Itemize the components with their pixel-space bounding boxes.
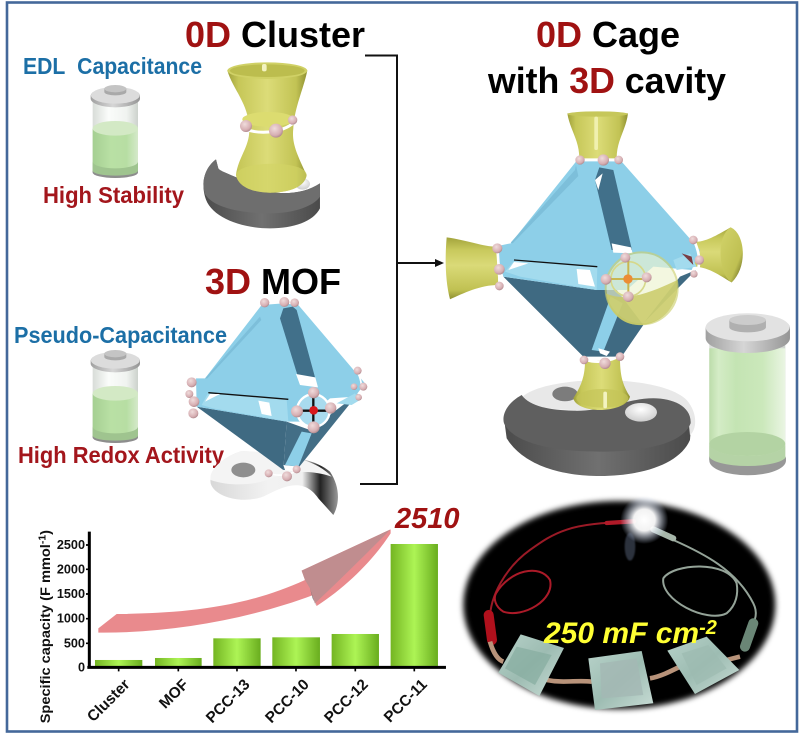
cage: light upper faces [495,161,700,290]
y axis title: ) [37,530,53,535]
x tick labels: PCC-11 [381,676,431,726]
bracket connector [360,56,397,484]
title: 0D Cage with 3D cavity: 0D Cage [536,14,680,55]
red wire [489,521,634,640]
y tick labels [57,538,85,674]
title: 3D MOF: 3D MOF [205,261,341,302]
y tick labels: 1500 [57,587,85,601]
label: Pseudo-Capacitance: Pseudo-Capacitance [14,322,227,348]
x tick labels: PCC-12 [321,676,372,727]
illustration: 0D cage with cavity [446,111,743,476]
arrow: to 0D cage [397,259,444,267]
left horn [446,237,498,299]
metal node balls [492,154,704,369]
cage: dark lower faces [503,277,643,357]
photo: LED powered by device chain [463,496,775,710]
cavity sphere [601,252,678,325]
x tick labels: PCC-10 [262,676,313,727]
label: High Redox Activity: High Redox Activity [18,442,224,468]
title: 0D Cage with 3D cavity [487,14,726,101]
axes [87,532,446,669]
y axis title: Specific capacity (F mmol [37,552,53,723]
y tick labels: 500 [64,636,85,650]
trend arrow [98,529,391,633]
x tick labels: Cluster [84,676,134,725]
right horn [693,227,743,282]
icon: battery small, cluster [91,85,140,178]
y tick labels: 2000 [57,562,85,576]
value label: 2510: 2510 [394,503,460,535]
bar chart: specific capacity [37,529,446,727]
label: High Stability: High Stability [43,182,184,208]
icon: battery small, MOF [91,350,140,443]
photo caption: 250 mF cm-2: -2 [699,617,717,639]
x tick labels: PCC-13 [203,676,253,727]
illustration: MOF octahedron on white base [185,297,367,515]
photo caption: 250 mF cm-2: 250 mF cm [544,617,699,650]
icon: large battery [706,313,790,475]
LED glow [620,496,668,544]
grey wire [653,529,756,647]
title: 0D Cluster: 0D Cluster [185,14,365,55]
x tick labels [84,676,431,727]
bottom horn [573,358,630,410]
title: 0D Cage with 3D cavity: with 3D cavity [487,60,726,101]
label: EDL Capacitance: EDL Capacitance [23,53,202,79]
y tick labels: 0 [78,660,85,674]
illustration: cluster on crescent base [203,62,320,228]
y axis title: -1 [37,534,48,544]
y tick labels: 1000 [57,612,85,626]
copper tape [490,642,740,682]
pouch cells [498,634,564,696]
bars [95,544,438,666]
y tick labels: 2500 [57,538,85,552]
top horn [567,111,628,158]
x tick labels: MOF [156,676,192,712]
yin-yang base [503,380,695,476]
